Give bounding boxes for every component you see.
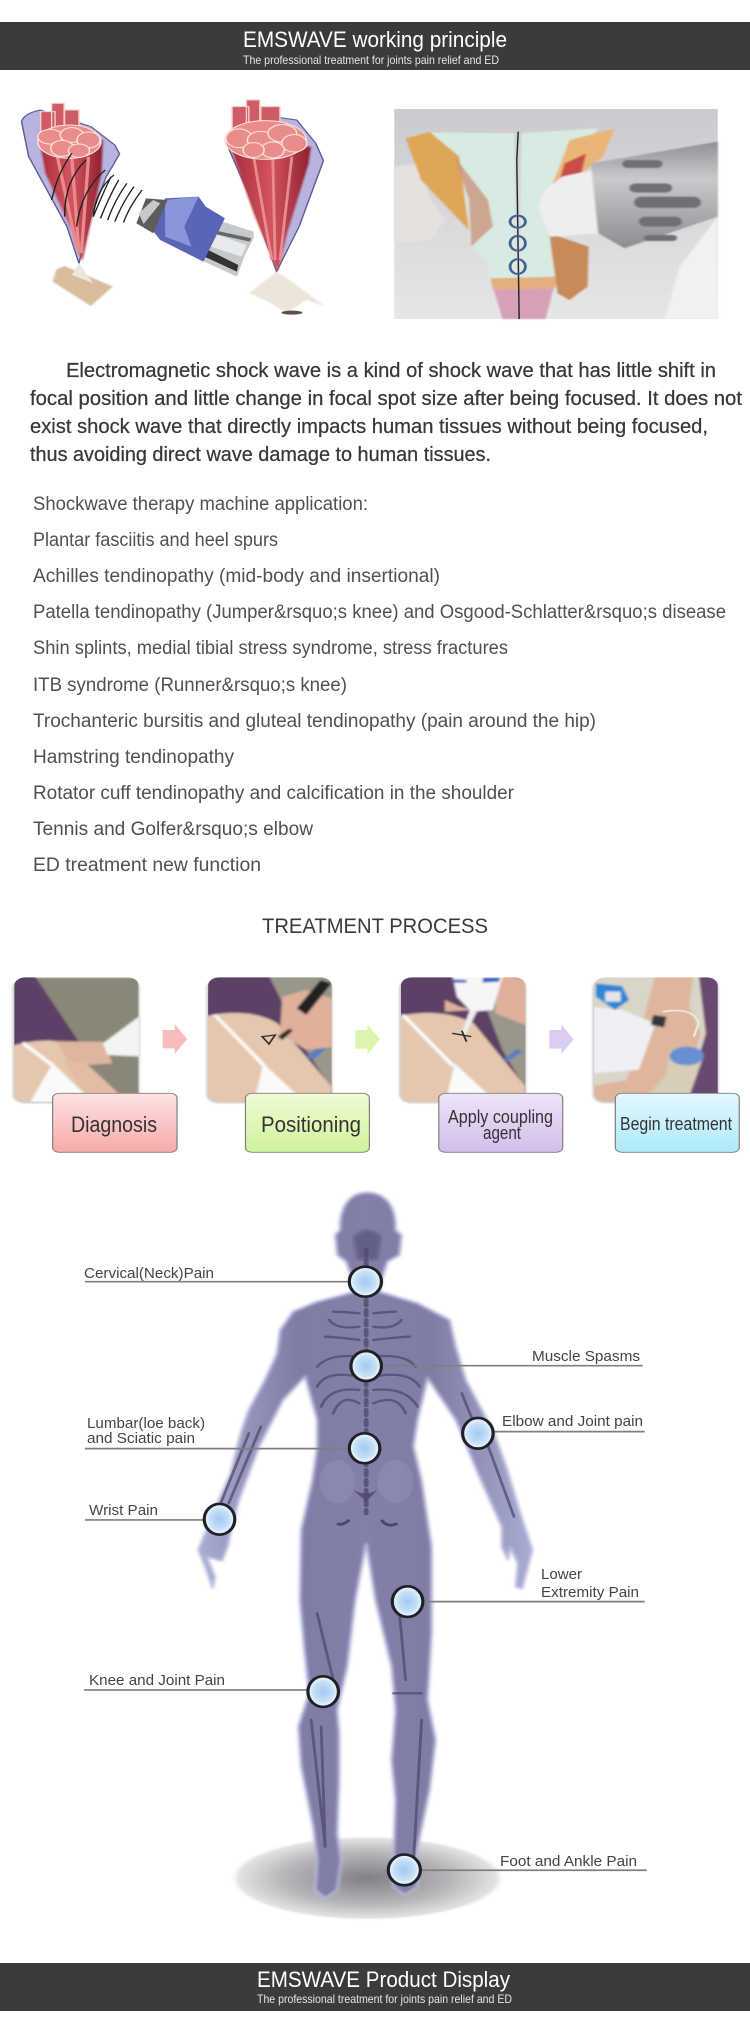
text block: application list	[33, 494, 726, 876]
body labels: Elbow and Joint pain	[502, 1414, 643, 1430]
body labels: Lumbar(loe back)	[87, 1416, 205, 1432]
icon: treated muscle with sheath	[22, 103, 120, 306]
text block: application list: Achilles tendinopathy (mid-body and insertional)	[33, 566, 440, 587]
body labels: Muscle Spasms	[532, 1349, 640, 1365]
icon: healed muscle with sheath	[225, 100, 325, 315]
icon: shock waves	[93, 177, 142, 223]
body labels: Knee and Joint Pain	[89, 1673, 225, 1689]
text block: application list: Patella tendinopathy (Jumper&rsquo;s knee) and Osgood-Schlatter&rsquo;s disease	[33, 602, 726, 623]
step labels: Diagnosis	[71, 1112, 157, 1137]
body labels: and Sciatic pain	[87, 1431, 195, 1447]
text block: application list: ED treatment new function	[33, 855, 261, 876]
text block: application list: Trochanteric bursitis and gluteal tendinopathy (pain around the hip)	[33, 711, 596, 732]
chart: body pain map	[84, 1193, 647, 1921]
ribs and spine	[221, 1250, 514, 1860]
body labels: Lower	[541, 1567, 582, 1583]
text block: description	[30, 360, 742, 466]
body labels: Wrist Pain	[89, 1503, 158, 1519]
text block: application list: Shin splints, medial tibial stress syndrome, stress fractures	[33, 638, 508, 659]
illustration: shock wave on muscle	[22, 100, 325, 315]
floor shadow	[229, 1836, 506, 1921]
subtitle: The professional treatment for joints pain relief and ED	[257, 1992, 512, 2006]
step labels: Apply coupling	[448, 1107, 553, 1127]
step labels	[71, 1107, 732, 1143]
photo: begin treatment	[590, 974, 723, 1105]
text block: description: Electromagnetic shock wave is a kind of shock wave that has little shift in	[66, 360, 716, 382]
body labels	[84, 1266, 643, 1870]
step labels: Begin treatment	[620, 1114, 732, 1134]
body figure	[199, 1193, 532, 1898]
text block: application list: ITB syndrome (Runner&rsquo;s knee)	[33, 675, 347, 696]
step labels: agent	[483, 1123, 521, 1143]
rounded label boxes	[53, 1093, 739, 1152]
photo: handpiece on anatomical model	[394, 109, 718, 319]
photo: diagnosis	[10, 974, 144, 1105]
arrow: step 1	[163, 1024, 187, 1054]
photo: apply coupling agent	[396, 974, 530, 1105]
text block: application list: Plantar fasciitis and heel spurs	[33, 530, 278, 551]
subtitle: The professional treatment for joints pain relief and ED	[243, 53, 499, 67]
leader lines	[84, 1282, 647, 1870]
treatment process photos and arrows	[10, 974, 739, 1152]
title: EMSWAVE working principle	[243, 27, 507, 52]
text block: description: exist shock wave that directly impacts human tissues without being focused,	[30, 416, 708, 438]
title: EMSWAVE Product Display	[257, 1967, 510, 1992]
pain markers	[204, 1267, 493, 1885]
body labels: Foot and Ankle Pain	[500, 1854, 637, 1870]
arrow: step 3	[549, 1025, 574, 1054]
body labels: Extremity Pain	[541, 1585, 639, 1601]
body labels: Cervical(Neck)Pain	[84, 1266, 214, 1282]
text block: application list: Rotator cuff tendinopathy and calcification in the shoulder	[33, 783, 515, 804]
text block: application list: Shockwave therapy machine application:	[33, 494, 368, 515]
text block: application list: Tennis and Golfer&rsquo;s elbow	[33, 819, 313, 840]
step labels: Positioning	[261, 1112, 361, 1137]
arrow: step 2	[356, 1025, 380, 1054]
icon: handpiece	[136, 197, 254, 277]
text block: application list: Hamstring tendinopathy	[33, 747, 234, 768]
text block: description: focal position and little change in focal spot size after being focused. It does not	[30, 388, 742, 410]
heading: treatment process: TREATMENT PROCESS	[262, 915, 488, 938]
top header banner	[0, 22, 750, 70]
photo: positioning	[203, 974, 336, 1105]
text block: description: thus avoiding direct wave damage to human tissues.	[30, 444, 491, 466]
bottom header banner	[0, 1963, 750, 2011]
